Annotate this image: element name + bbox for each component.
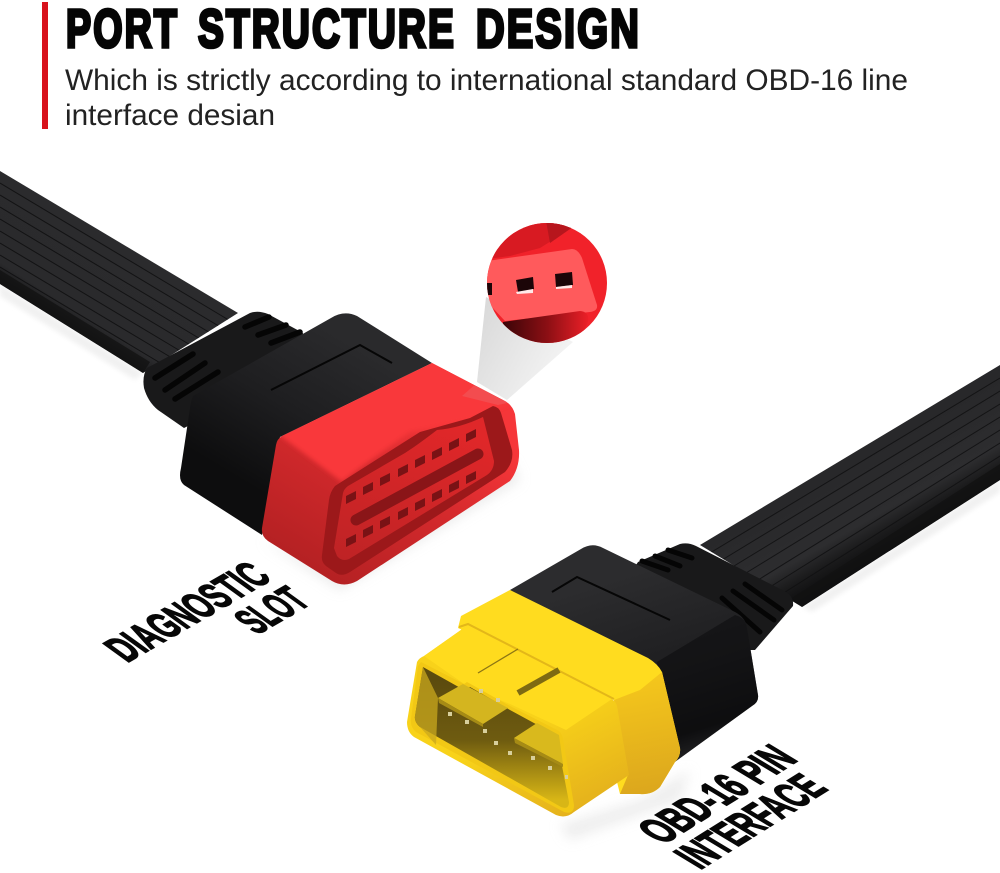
plug top — [424, 625, 612, 730]
subtitle text: Which is strictly according to international standard OBD-16 line — [65, 64, 908, 97]
label: diagnostic slot — [94, 555, 320, 669]
contact holes — [484, 272, 573, 295]
title: PORT — [66, 0, 179, 59]
cable: left ribbon to diagnostic slot — [0, 171, 238, 380]
label: diagnostic slot: DIAGNOSTIC — [94, 555, 282, 669]
strain relief — [620, 543, 793, 650]
shell top face — [278, 355, 515, 482]
connector: diagnostic slot (red) — [143, 312, 520, 590]
keyway slot — [518, 670, 559, 693]
socket pin holes — [346, 429, 476, 547]
magnifier circle: close-up of slot contacts — [487, 223, 607, 343]
cavity left wall — [415, 667, 438, 745]
contact pins — [448, 689, 568, 779]
recess line — [271, 345, 392, 390]
magnifier cone — [477, 297, 573, 400]
label: OBD-16 pin interface — [627, 738, 839, 873]
inner cavity — [415, 667, 569, 808]
recess line — [552, 577, 670, 620]
collar ledge — [459, 624, 614, 699]
inner socket face — [334, 417, 494, 560]
title: DESIGN — [476, 0, 641, 59]
label: diagnostic slot: SLOT — [224, 580, 320, 641]
subtitle text — [65, 64, 908, 132]
opening rim — [322, 406, 512, 575]
centre slot — [356, 454, 478, 520]
subtitle text: interface desian — [65, 99, 275, 132]
yellow collar — [458, 590, 680, 794]
cable: right ribbon to OBD pin interface — [700, 365, 1000, 612]
shadow — [560, 770, 690, 840]
title: STRUCTURE — [198, 0, 456, 59]
black housing — [180, 313, 432, 535]
housing side — [657, 615, 758, 764]
connector: OBD-16 pin interface (yellow) — [407, 543, 793, 840]
title — [66, 0, 641, 59]
grip slots — [642, 550, 782, 632]
label: OBD-16 pin interface: INTERFACE — [664, 768, 839, 873]
grip slots — [155, 317, 300, 399]
collar front face — [614, 672, 680, 794]
red shell — [262, 363, 519, 584]
plug body — [407, 625, 629, 816]
header accent bar — [42, 2, 48, 129]
lower contact block — [514, 723, 563, 764]
top seam line — [478, 649, 518, 673]
shadow — [262, 460, 520, 590]
strain relief — [143, 312, 303, 428]
label: OBD-16 pin interface: OBD-16 PIN — [627, 738, 808, 851]
upper contact block — [438, 684, 508, 724]
black housing — [510, 545, 758, 764]
opening rim — [411, 662, 574, 813]
